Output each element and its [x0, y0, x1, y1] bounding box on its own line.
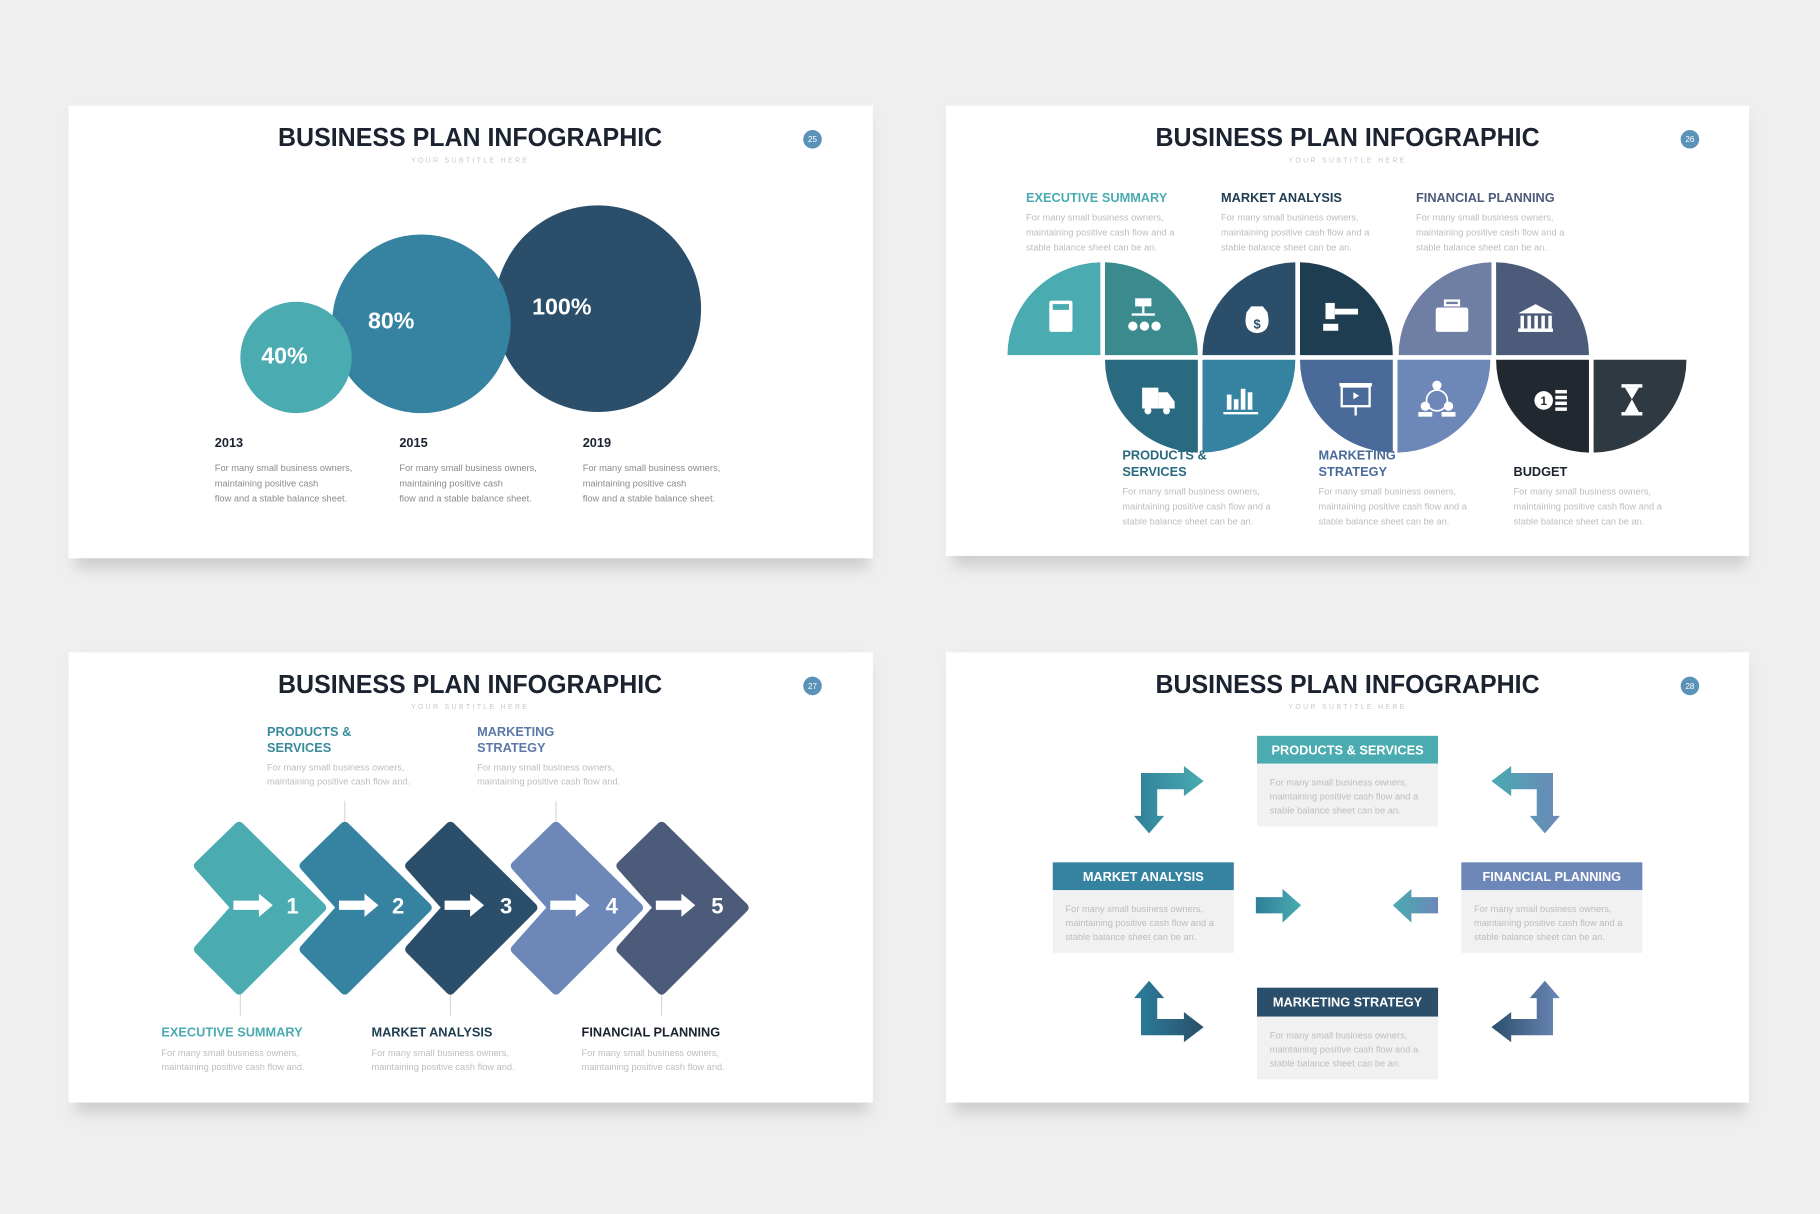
step arrows and numbers: 4 [606, 893, 619, 918]
year 2015 [399, 435, 537, 503]
text: budget: stable balance sheet can be an. [1514, 517, 1644, 527]
text: financial planning: FINANCIAL PLANNING [1416, 190, 1555, 205]
text: products & services: PRODUCTS & [1122, 448, 1207, 463]
page badge [803, 677, 822, 695]
year 2015: For many small business owners, [399, 463, 537, 473]
panel: half-circle wave [946, 106, 1749, 556]
circle chart: 40% [261, 342, 308, 368]
panel: cycle diagram [946, 652, 1749, 1103]
text: products & services: SERVICES [267, 740, 331, 755]
box: marketing strategy: For many small business owners, [1270, 1031, 1407, 1041]
wave chart [1007, 262, 1686, 453]
subtitle: YOUR SUBTITLE HERE [1288, 704, 1407, 711]
box: marketing strategy: stable balance sheet can be an. [1270, 1059, 1401, 1069]
year 2013: flow and a stable balance sheet. [215, 493, 347, 503]
year 2013 [215, 435, 352, 503]
arrow: bottom-right corner [1491, 981, 1560, 1042]
box: marketing strategy [1257, 988, 1438, 1079]
text: budget [1514, 464, 1663, 527]
text: products & services: maintaining positive cash flow and a [1122, 502, 1272, 512]
arrow: top-left corner [1134, 766, 1204, 833]
text: marketing strategy [1319, 448, 1468, 527]
step arrows and numbers: 5 [711, 893, 723, 918]
text: executive summary: maintaining positive cash flow and a [1026, 228, 1175, 238]
text: marketing strategy: MARKETING [477, 724, 554, 739]
box: market analysis: stable balance sheet can be an. [1066, 932, 1196, 942]
box: marketing strategy: maintaining positive cash flow and a [1270, 1045, 1419, 1055]
page badge [1681, 130, 1699, 149]
text: financial planning: For many small business owners, [1416, 213, 1554, 223]
text: financial planning: FINANCIAL PLANNING [582, 1024, 720, 1039]
box: market analysis: For many small business owners, [1066, 904, 1203, 914]
page badge: 25 [808, 135, 818, 144]
text: executive summary: maintaining positive cash flow and. [161, 1062, 305, 1072]
circle chart [240, 205, 701, 413]
arrow: bottom-left corner [1134, 981, 1204, 1042]
arrow: top-right corner [1491, 766, 1560, 833]
text: products & services: maintaining positive cash flow and. [267, 777, 410, 787]
text: executive summary: EXECUTIVE SUMMARY [1026, 190, 1168, 205]
text: products & services: For many small business owners, [1122, 486, 1260, 496]
box: products & services: maintaining positive cash flow and a [1270, 792, 1419, 802]
text: market analysis: stable balance sheet can be an. [1221, 243, 1352, 253]
year 2015: maintaining positive cash [399, 478, 503, 488]
text: marketing strategy: maintaining positive cash flow and a [1319, 502, 1468, 512]
text: executive summary [161, 1024, 305, 1072]
page badge: 28 [1685, 682, 1695, 691]
box: financial planning [1461, 862, 1642, 953]
heading: BUSINESS PLAN INFOGRAPHIC [1155, 671, 1540, 699]
year 2015: 2015 [399, 435, 428, 450]
text: budget: maintaining positive cash flow and a [1514, 502, 1663, 512]
step arrows and numbers [233, 893, 723, 918]
panel: chevron steps [69, 652, 873, 1103]
text: marketing strategy: For many small business owners, [477, 763, 615, 773]
year 2015: flow and a stable balance sheet. [399, 493, 532, 503]
box: products & services: For many small business owners, [1270, 778, 1407, 788]
connector lines [240, 801, 662, 1016]
icons: 1 [1540, 395, 1547, 408]
heading: BUSINESS PLAN INFOGRAPHIC [278, 124, 662, 152]
box: financial planning: maintaining positive cash flow and a [1474, 918, 1623, 928]
text: financial planning [582, 1024, 725, 1072]
text: products & services [1122, 448, 1272, 527]
subtitle: YOUR SUBTITLE HERE [411, 704, 529, 711]
text: market analysis: MARKET ANALYSIS [371, 1024, 492, 1039]
subtitle: YOUR SUBTITLE HERE [411, 157, 529, 164]
text: financial planning: For many small business owners, [582, 1048, 719, 1058]
box: financial planning: For many small business owners, [1474, 904, 1612, 914]
text: financial planning: maintaining positive cash flow and. [582, 1062, 725, 1072]
chevrons [199, 826, 744, 990]
text: products & services: SERVICES [1122, 464, 1187, 479]
text: market analysis [371, 1024, 515, 1072]
text: marketing strategy: STRATEGY [477, 740, 546, 755]
year 2019: 2019 [583, 435, 611, 450]
page badge: 26 [1685, 135, 1695, 144]
year 2019: For many small business owners, [583, 463, 720, 473]
icons [1049, 298, 1642, 417]
box: products & services [1257, 736, 1438, 826]
text: executive summary: stable balance sheet can be an. [1026, 243, 1157, 253]
circle chart: 80% [368, 307, 415, 333]
text: market analysis [1221, 190, 1370, 253]
year 2019: flow and a stable balance sheet. [583, 493, 715, 503]
text: market analysis: maintaining positive cash flow and a [1221, 228, 1370, 238]
text: market analysis: For many small business owners, [1221, 213, 1359, 223]
page badge [1681, 677, 1699, 695]
text: financial planning: stable balance sheet can be an. [1416, 243, 1547, 253]
text: financial planning [1416, 190, 1565, 253]
icons: $ [1253, 316, 1261, 331]
text: market analysis: For many small business owners, [371, 1048, 509, 1058]
box: financial planning: stable balance sheet can be an. [1474, 932, 1605, 942]
box: products & services: PRODUCTS & SERVICES [1272, 742, 1424, 757]
text: marketing strategy: maintaining positive cash flow and. [477, 777, 620, 787]
text: products & services [267, 724, 410, 787]
text: financial planning: maintaining positive cash flow and a [1416, 228, 1565, 238]
text: executive summary [1026, 190, 1175, 253]
box: market analysis [1053, 862, 1234, 953]
text: marketing strategy: stable balance sheet can be an. [1319, 517, 1449, 527]
text: marketing strategy: MARKETING [1319, 448, 1396, 463]
text: marketing strategy: For many small business owners, [1319, 486, 1456, 496]
text: executive summary: For many small business owners, [1026, 213, 1164, 223]
arrow: right center-left [1256, 889, 1301, 923]
year 2019 [583, 435, 720, 503]
step arrows and numbers: 2 [392, 893, 404, 918]
step arrows and numbers: 1 [286, 893, 299, 918]
year 2013: 2013 [215, 435, 243, 450]
heading: BUSINESS PLAN INFOGRAPHIC [278, 671, 662, 699]
text: products & services: stable balance sheet can be an. [1122, 517, 1253, 527]
year 2019: maintaining positive cash [583, 478, 686, 488]
year 2013: For many small business owners, [215, 463, 352, 473]
text: market analysis: maintaining positive cash flow and. [371, 1062, 515, 1072]
year 2013: maintaining positive cash [215, 478, 318, 488]
box: market analysis: maintaining positive cash flow and a [1066, 918, 1215, 928]
page badge: 27 [808, 682, 818, 691]
text: budget: For many small business owners, [1514, 486, 1651, 496]
text: products & services: PRODUCTS & [267, 724, 351, 739]
text: budget: BUDGET [1514, 464, 1568, 479]
subtitle: YOUR SUBTITLE HERE [1288, 157, 1407, 164]
box: financial planning: FINANCIAL PLANNING [1483, 869, 1621, 884]
text: products & services: For many small business owners, [267, 763, 405, 773]
text: marketing strategy: STRATEGY [1319, 464, 1388, 479]
circle chart: 100% [532, 294, 592, 320]
arrow: left center-right [1393, 889, 1438, 923]
page badge [803, 130, 822, 149]
box: market analysis: MARKET ANALYSIS [1083, 869, 1204, 884]
step arrows and numbers: 3 [500, 893, 512, 918]
box: products & services: stable balance sheet can be an. [1270, 806, 1401, 816]
text: market analysis: MARKET ANALYSIS [1221, 190, 1342, 205]
box: marketing strategy: MARKETING STRATEGY [1273, 994, 1423, 1009]
heading: BUSINESS PLAN INFOGRAPHIC [1155, 124, 1540, 152]
text: executive summary: For many small business owners, [161, 1048, 299, 1058]
panel: growth circles [69, 106, 873, 558]
panel shadows [76, 116, 1746, 1113]
text: executive summary: EXECUTIVE SUMMARY [161, 1024, 303, 1039]
text: marketing strategy [477, 724, 620, 787]
